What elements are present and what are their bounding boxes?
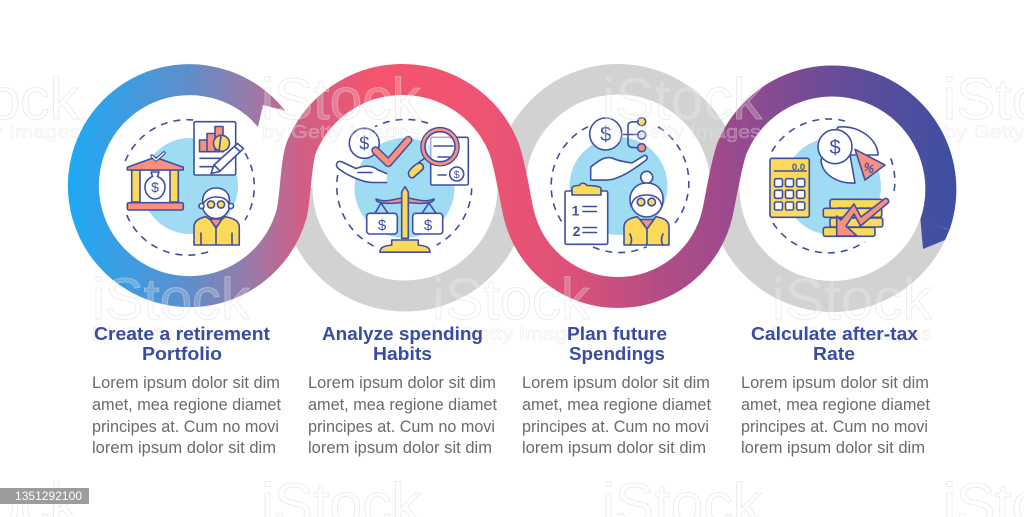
body text 2: lorem ipsum dolor sit dim <box>308 439 492 457</box>
dashed ring 4 <box>772 119 895 253</box>
body text 1 <box>92 374 281 457</box>
watermarks: iStock <box>432 267 591 332</box>
icon: numbered clipboard: 2 <box>573 223 581 239</box>
panel: step 1 text <box>92 323 281 457</box>
dashed ring 1 <box>125 120 254 255</box>
body text 4: amet, mea regione diamet <box>741 396 930 414</box>
body text 2: Lorem ipsum dolor sit dim <box>308 374 496 392</box>
watermarks: by Getty Images <box>603 122 761 142</box>
icon: bank with money bag: $ <box>151 179 159 195</box>
body text 1: Lorem ipsum dolor sit dim <box>92 374 280 392</box>
icon: elderly woman <box>624 171 669 245</box>
body text 4 <box>741 374 930 457</box>
body text 2: amet, mea regione diamet <box>308 396 497 414</box>
image id badge <box>0 488 89 504</box>
heading: create a retirement portfolio: Portfolio <box>142 343 222 364</box>
panel: step 3 text <box>522 323 711 457</box>
light blue disc 3 <box>570 137 668 235</box>
grey background rings <box>297 80 941 297</box>
panel: step 4 text <box>741 323 930 457</box>
light blue disc 2 <box>354 138 454 238</box>
panel: step 4 icon group <box>770 119 895 253</box>
icon: balance scale with dollar pans: $ <box>378 217 387 234</box>
body text 2: principes at. Cum no movi <box>308 418 495 436</box>
gradient ribbon connecting the four steps <box>83 79 949 293</box>
icon: coin stack with falling arrow <box>823 198 889 236</box>
watermarks: iStock <box>261 67 422 132</box>
watermarks: by Getty Images <box>432 324 590 344</box>
icon: open hand <box>591 155 647 180</box>
body text 3: Lorem ipsum dolor sit dim <box>522 374 710 392</box>
icon: pie chart with coin and percent tag: % <box>862 160 877 177</box>
watermarks: iStock <box>772 267 933 332</box>
heading: plan future spendings: Spendings <box>569 343 665 364</box>
body text 4: principes at. Cum no movi <box>741 418 928 436</box>
heading: create a retirement portfolio: Create a retirement <box>94 323 270 344</box>
body text 4: Lorem ipsum dolor sit dim <box>741 374 929 392</box>
heading: plan future spendings: Plan future <box>567 323 667 344</box>
heading: calculate after-tax rate: Rate <box>813 343 855 364</box>
body text 4: lorem ipsum dolor sit dim <box>741 439 925 457</box>
body text 1: amet, mea regione diamet <box>92 396 281 414</box>
heading: calculate after-tax rate: Calculate after-tax <box>751 323 919 344</box>
watermarks: iStock <box>602 67 763 132</box>
light blue disc 1 <box>142 138 238 234</box>
body text 1: lorem ipsum dolor sit dim <box>92 439 276 457</box>
body text 2 <box>308 374 497 457</box>
icon: coin in hand with check: $ <box>359 134 369 154</box>
body text 3: principes at. Cum no movi <box>522 418 709 436</box>
dashed ring 2 <box>337 119 472 247</box>
body text 3 <box>522 374 711 457</box>
heading: analyze spending habits <box>322 323 483 364</box>
icon: numbered clipboard <box>565 183 608 244</box>
icon: elderly man <box>194 188 239 245</box>
image id badge: 1351292100 <box>15 489 82 503</box>
panel: step 2 text <box>308 323 497 457</box>
body text 3: lorem ipsum dolor sit dim <box>522 439 706 457</box>
icon: document under magnifier: $ <box>454 169 460 181</box>
body text 3: amet, mea regione diamet <box>522 396 711 414</box>
icon: pie chart with coin and percent tag: $ <box>829 137 841 159</box>
heading: analyze spending habits: Analyze spending <box>322 323 483 344</box>
watermarks: by Getty Images <box>262 122 420 142</box>
panel: step 2 icon group <box>337 119 472 252</box>
icon: report with chart and pencil <box>194 122 244 175</box>
heading: create a retirement portfolio <box>94 323 270 364</box>
light blue disc 4 <box>784 138 881 235</box>
icon: balance scale with dollar pans: $ <box>424 217 433 234</box>
icon: pie chart with coin and percent tag <box>818 127 885 183</box>
white inner discs <box>98 94 924 280</box>
icon: balance scale with dollar pans <box>367 187 443 252</box>
panel: step 1 icon group <box>125 120 254 255</box>
heading: analyze spending habits: Habits <box>373 343 432 364</box>
watermarks: iStock <box>92 267 251 332</box>
body text 1: principes at. Cum no movi <box>92 418 279 436</box>
icon: numbered clipboard: 1 <box>572 202 580 218</box>
watermarks: by Getty Images <box>92 324 250 344</box>
heading: plan future spendings <box>567 323 667 364</box>
watermarks: by Getty Images <box>772 324 932 344</box>
icon: coin with branches: $ <box>600 124 611 146</box>
panel: step 3 icon group <box>551 118 689 253</box>
icon: calculator: 0.0 <box>792 162 805 173</box>
dashed ring 3 <box>551 127 689 253</box>
heading: calculate after-tax rate <box>751 323 919 364</box>
